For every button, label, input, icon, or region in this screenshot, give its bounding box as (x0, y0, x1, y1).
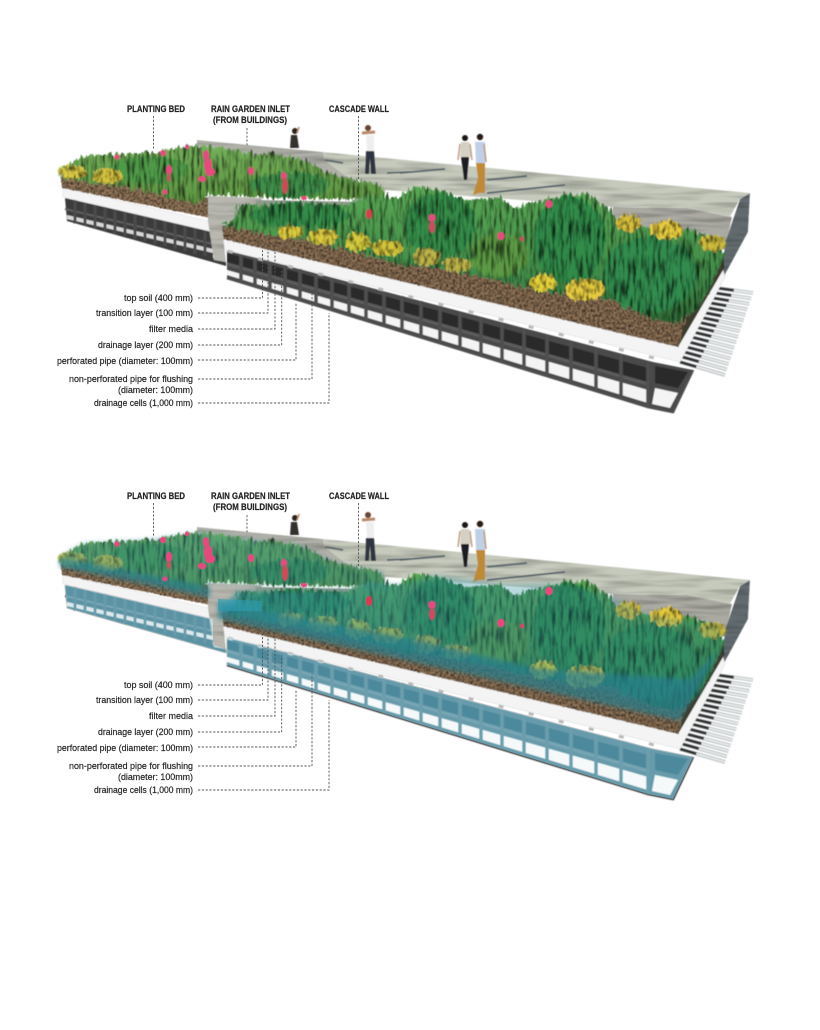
label: pipe diameter: (diameter: 100mm) (118, 385, 193, 395)
soil: rear bed (60, 170, 210, 218)
walking man (473, 134, 486, 195)
label: non-perforated pipe: non-perforated pipe for flushing (69, 761, 193, 771)
label: rain garden inlet: RAIN GARDEN INLET (211, 491, 290, 501)
concrete divider wall (208, 196, 368, 262)
layer leader lines (198, 245, 329, 403)
person photographing (362, 125, 376, 174)
label: cascade wall: CASCADE WALL (329, 104, 389, 114)
label: top soil: top soil (400 mm) (124, 680, 193, 690)
water tint: rear cells (65, 585, 226, 653)
water tint: rear planting (60, 532, 385, 591)
label: planting bed: PLANTING BED (127, 491, 185, 501)
drainage cells: rear bed (65, 198, 226, 266)
label: planting bed: PLANTING BED (127, 104, 185, 114)
diagram: flooded rain garden section (59, 512, 753, 799)
person sitting on wall (290, 127, 299, 148)
layer leader lines (198, 632, 329, 790)
label: from buildings: (FROM BUILDINGS) (213, 115, 287, 125)
layer labels: dry section (57, 245, 329, 408)
label: perforated pipe: perforated pipe (diameter: 100mm) (57, 356, 193, 366)
flowers above water (114, 532, 552, 628)
diagram: dry rain garden section (59, 125, 753, 412)
front planting (220, 186, 725, 323)
water in wall (218, 599, 262, 611)
top leader lines (154, 503, 358, 567)
front yellow plants (277, 214, 726, 301)
layer labels: flooded section (57, 632, 329, 795)
retaining wall behind planting (610, 207, 732, 250)
top callouts: dry section (127, 104, 389, 180)
label: drainage cells: drainage cells (1,000 mm) (94, 785, 193, 795)
label: from buildings: (FROM BUILDINGS) (213, 502, 287, 512)
soil: front bed (218, 215, 690, 347)
label: transition layer: transition layer (100 mm) (96, 308, 193, 318)
label: rain garden inlet: RAIN GARDEN INLET (211, 104, 290, 114)
label: top soil: top soil (400 mm) (124, 293, 193, 303)
walking woman (458, 135, 472, 180)
label: drainage layer: drainage layer (200 mm) (98, 340, 193, 350)
top callouts: flooded section (127, 491, 389, 567)
soil side profile (678, 252, 724, 347)
drainage cells: front bed (227, 250, 693, 412)
label: drainage cells: drainage cells (1,000 mm) (94, 398, 193, 408)
people shadows (325, 160, 565, 193)
water tint: front planting (220, 575, 725, 710)
pink flowers (114, 145, 552, 242)
repeated base scene (59, 512, 753, 799)
curved seating wall (197, 140, 385, 192)
label: non-perforated pipe: non-perforated pipe for flushing (69, 374, 193, 384)
label: pipe diameter: (diameter: 100mm) (118, 772, 193, 782)
outlet pipes (680, 288, 753, 375)
water surface: front bed (218, 602, 720, 721)
rear planting (60, 145, 385, 204)
rear yellow plants (59, 165, 124, 184)
top leader lines (154, 116, 358, 180)
label: transition layer: transition layer (100 mm) (96, 695, 193, 705)
concrete pavement (323, 152, 750, 222)
water surface: rear bed (60, 557, 210, 598)
label: perforated pipe: perforated pipe (diameter: 100mm) (57, 743, 193, 753)
right concrete face (722, 193, 750, 280)
water tint: front cells (227, 637, 693, 799)
label: filter media: filter media (149, 711, 194, 721)
label: filter media: filter media (149, 324, 194, 334)
label: drainage layer: drainage layer (200 mm) (98, 727, 193, 737)
white transition layer: rear bed (63, 188, 213, 232)
white transition layer: front bed (218, 238, 725, 364)
label: cascade wall: CASCADE WALL (329, 491, 389, 501)
